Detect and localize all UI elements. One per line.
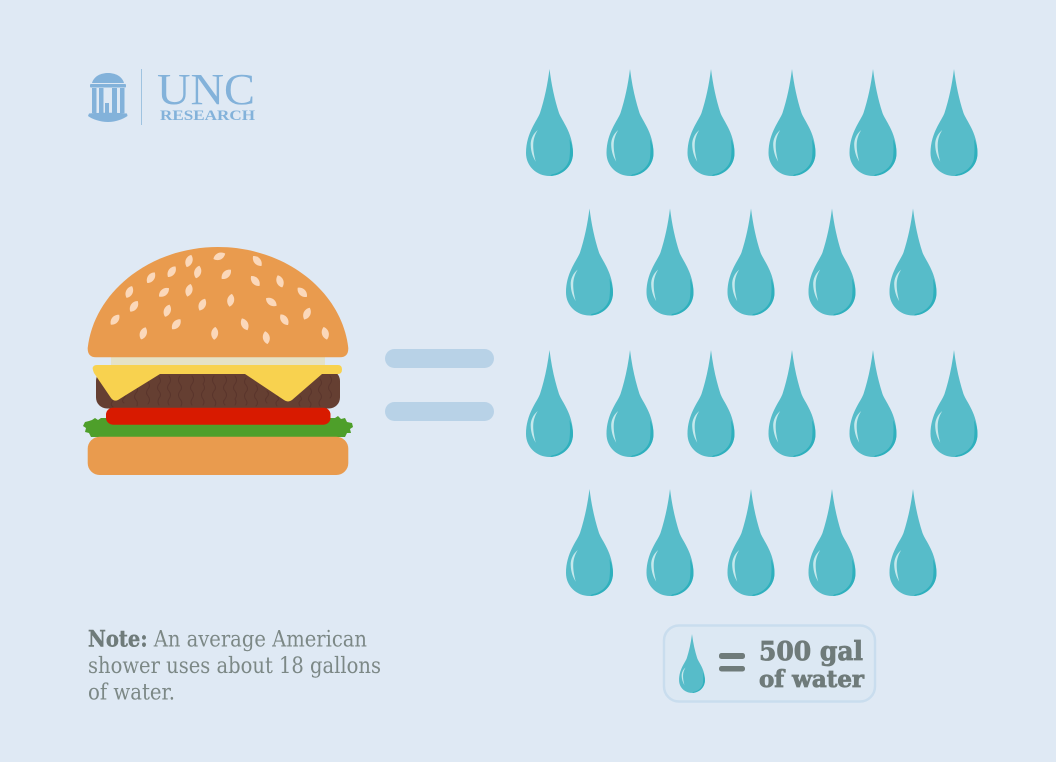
icon: legend equals <box>719 653 745 672</box>
icon: legend water drop <box>679 634 705 693</box>
lettuce <box>83 416 353 437</box>
legend <box>664 626 875 702</box>
patty texture <box>111 376 332 407</box>
note text: of water. <box>88 680 175 706</box>
legend label <box>759 637 865 693</box>
logo: UNC Research <box>88 65 255 125</box>
drops row 1 <box>526 69 978 176</box>
note text: Note: An average American <box>88 626 367 652</box>
divider <box>141 69 142 125</box>
water drops grid <box>526 69 978 596</box>
top bun <box>88 247 348 357</box>
wordmark RESEARCH: RESEARCH <box>160 108 255 124</box>
legend label: 500 gal <box>759 637 863 667</box>
sesame seeds <box>108 250 330 345</box>
note text <box>88 626 381 706</box>
drops row 3 <box>526 350 978 457</box>
bottom bun <box>88 437 348 475</box>
cheese slice <box>93 365 342 402</box>
icon: equals sign <box>385 349 494 421</box>
drops row 2 <box>566 208 936 316</box>
wordmark UNC: UNC <box>157 65 255 114</box>
mayo layer <box>111 355 325 367</box>
legend box <box>664 626 875 702</box>
note text: shower uses about 18 gallons <box>88 654 381 679</box>
illustration: hamburger <box>83 247 353 475</box>
beef patty <box>96 370 340 408</box>
tomato <box>106 408 330 425</box>
drops row 4 <box>566 489 936 596</box>
icon: Old Well cupola <box>88 73 128 122</box>
legend label: of water <box>759 666 865 693</box>
